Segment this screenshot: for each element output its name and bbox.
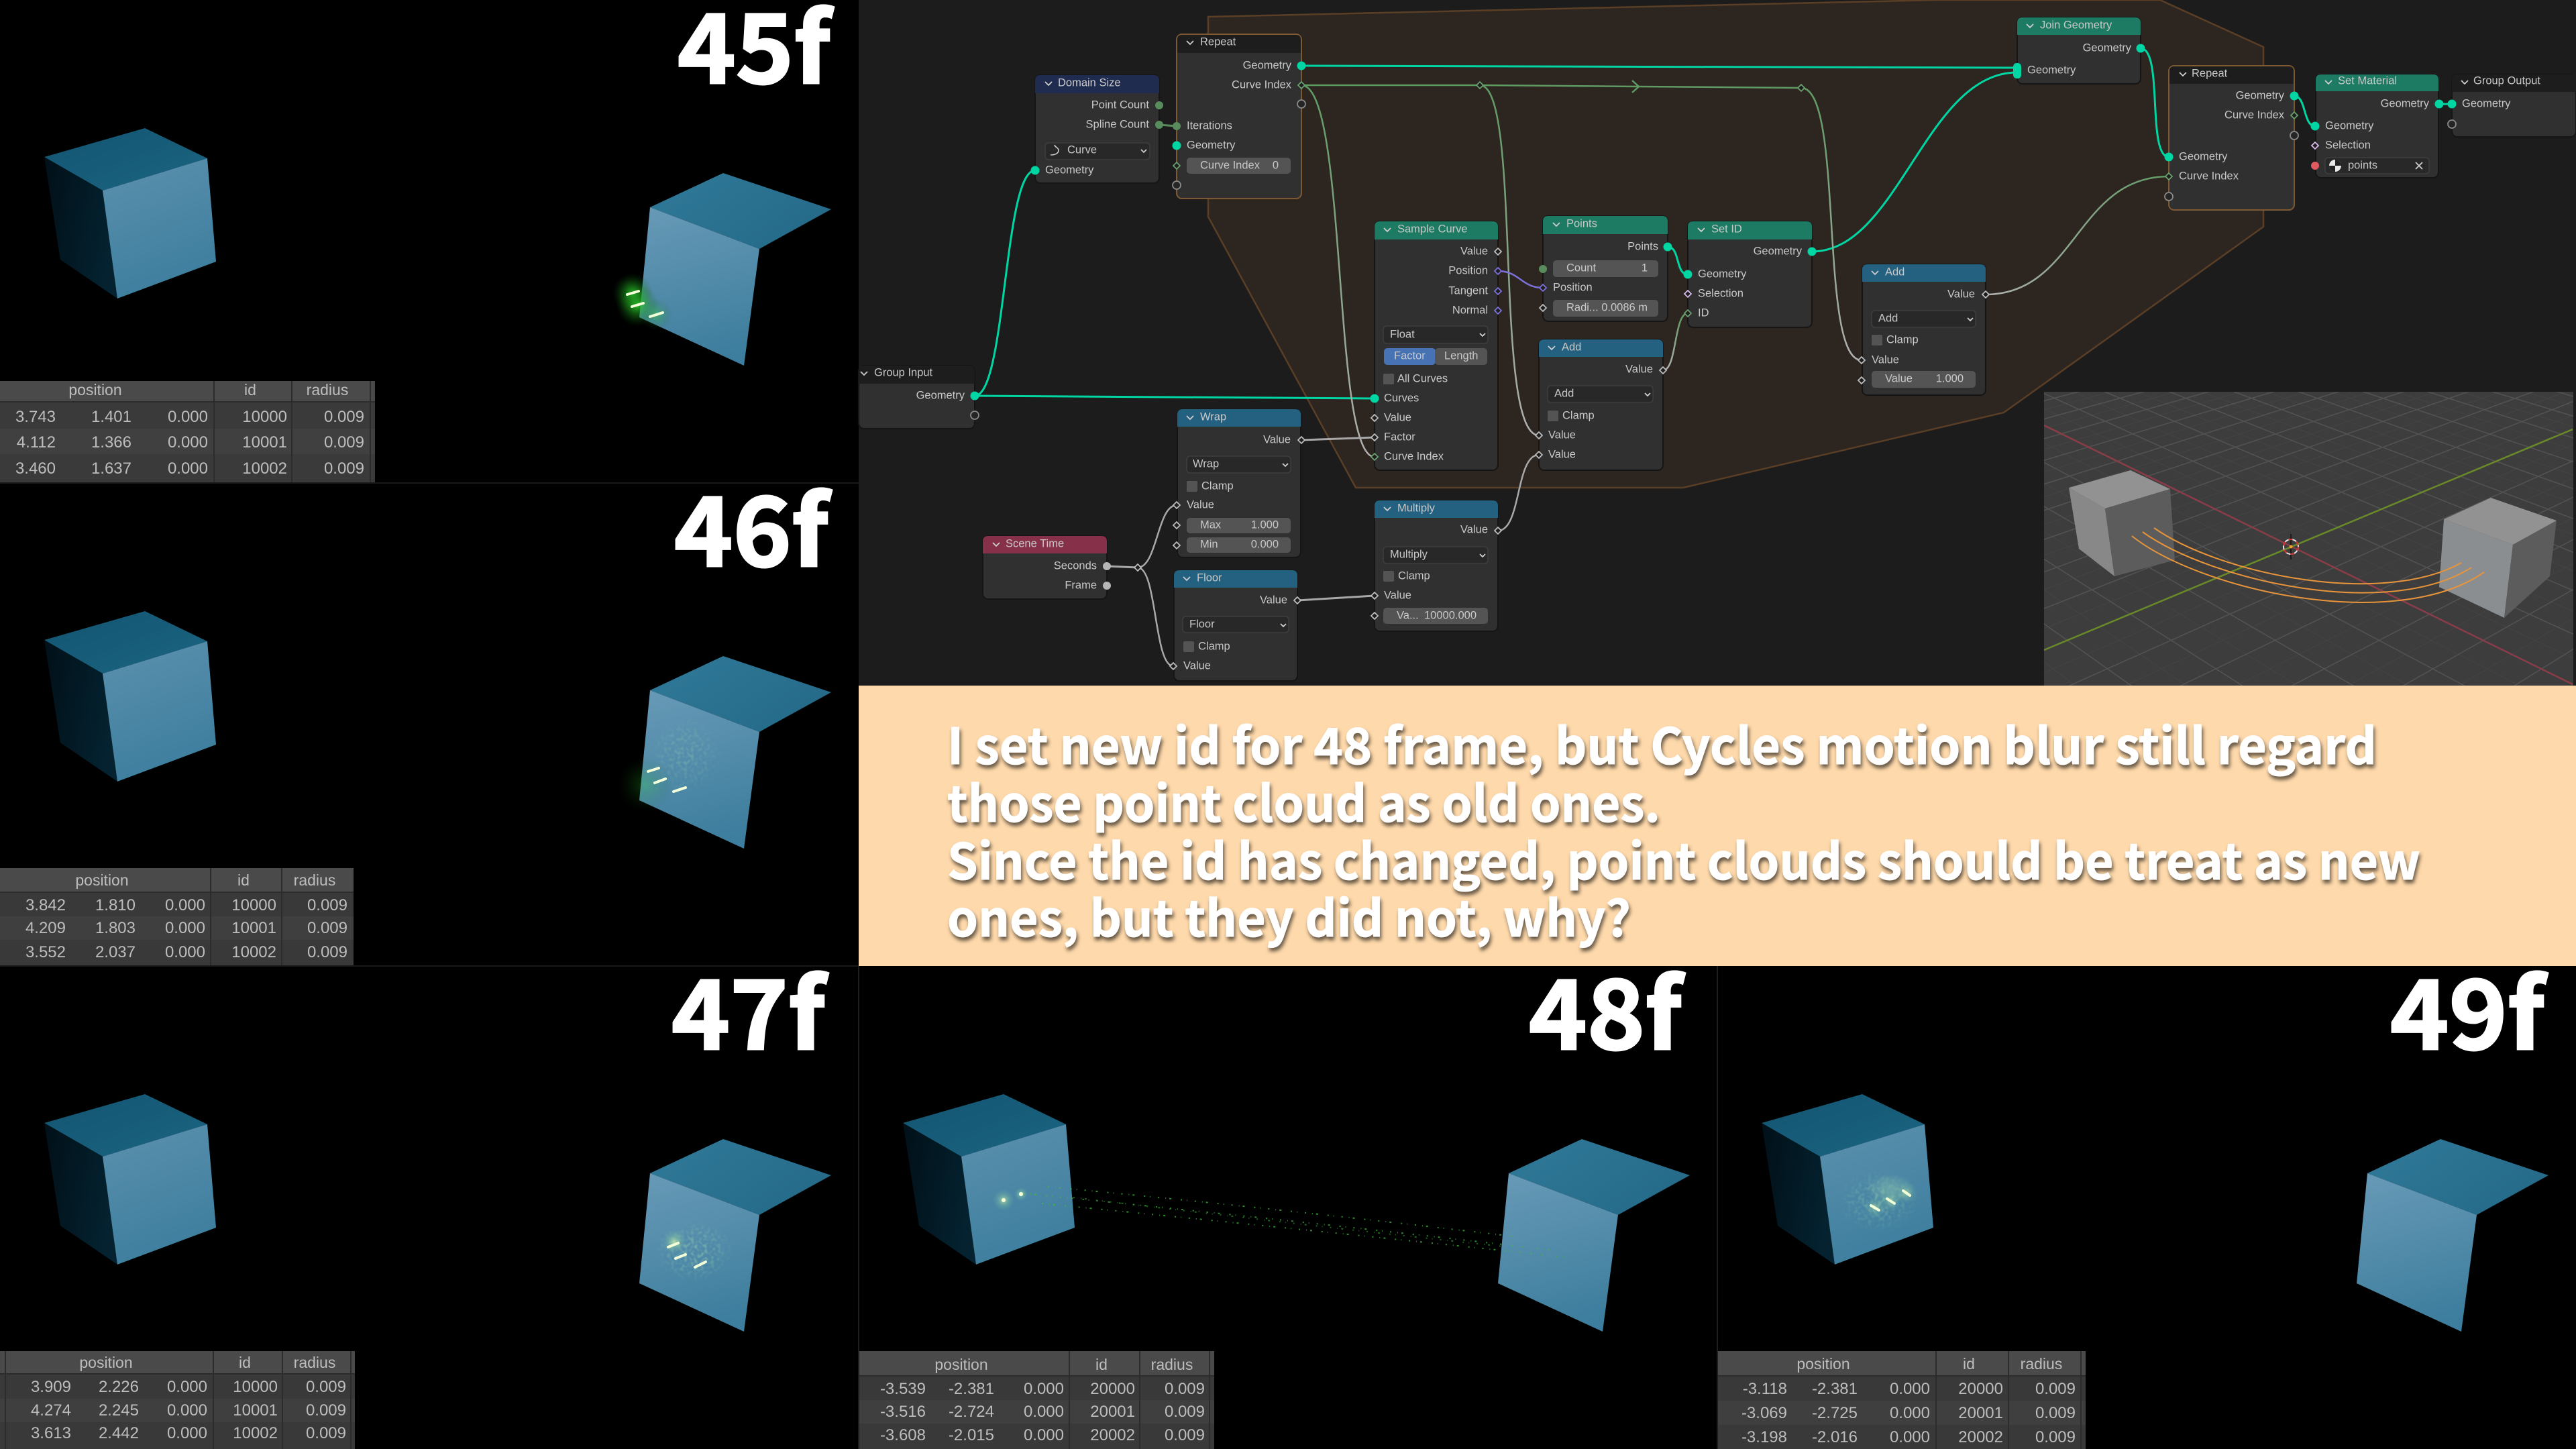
spreadsheet 45f: 0.009	[324, 408, 364, 426]
node: Group Output: Group Output	[2473, 75, 2540, 87]
spreadsheet 47f: 2.442	[99, 1424, 139, 1442]
spreadsheet 48f: -3.539	[880, 1380, 926, 1398]
node: Repeat output: Repeat	[2192, 67, 2228, 79]
node: Points: Points	[1627, 240, 1658, 252]
node: Add (Value): Add	[1562, 341, 1581, 353]
node: Scene Time	[983, 536, 1111, 599]
node: Add (Value): Value	[1548, 429, 1576, 441]
node: Points: Radi...	[1566, 302, 1599, 314]
spreadsheet 46f	[0, 868, 354, 966]
node: Domain Size: Curve	[1067, 144, 1097, 156]
node: Add (Curve Index): Add	[1878, 313, 1898, 325]
spreadsheet 49f: -2.016	[1812, 1428, 1858, 1446]
node: Floor: Floor	[1197, 572, 1222, 584]
spreadsheet 47f: 0.009	[306, 1424, 346, 1442]
spreadsheet 49f: -3.198	[1741, 1428, 1787, 1446]
node: Join Geometry: Join Geometry	[2040, 19, 2112, 31]
spreadsheet 49f: -3.118	[1743, 1380, 1787, 1398]
spreadsheet 49f: 0.009	[2035, 1380, 2076, 1398]
spreadsheet 49f: 20001	[1958, 1404, 2003, 1422]
spreadsheet 47f: 3.909	[31, 1378, 71, 1396]
spreadsheet 48f: 0.009	[1165, 1426, 1205, 1444]
node: Repeat output: Geometry	[2236, 90, 2285, 102]
node: Add (Value): Clamp	[1562, 409, 1595, 421]
panel: frame 47f render	[0, 938, 831, 1449]
node: Multiply: Value	[1460, 523, 1488, 535]
spreadsheet 46f: 1.803	[95, 919, 136, 937]
node: Group Input	[859, 366, 979, 429]
spreadsheet 45f: 0.009	[324, 433, 364, 451]
node: Repeat input: Geometry	[1243, 59, 1292, 71]
node: Domain Size: Domain Size	[1058, 76, 1121, 89]
node: Sample Curve: All Curves	[1397, 373, 1448, 385]
spreadsheet 47f: 0.009	[306, 1378, 346, 1396]
node: Set Material	[2310, 74, 2443, 178]
banner text: ones, but they did not, why?	[947, 879, 1631, 951]
spreadsheet 45f: 10000	[242, 408, 287, 426]
node: Domain Size: Point Count	[1091, 99, 1149, 111]
spreadsheet 48f: -2.381	[949, 1380, 994, 1398]
title 46f: 46f	[674, 455, 832, 594]
spreadsheet 47f: 10002	[233, 1424, 278, 1442]
node: Set ID: ID	[1698, 307, 1709, 319]
spreadsheet 47f: 2.245	[99, 1401, 139, 1419]
spreadsheet 46f: 0.000	[165, 896, 205, 914]
spreadsheet 49f: id	[1963, 1355, 1975, 1373]
spreadsheet 49f: 20000	[1958, 1380, 2003, 1398]
node: Floor	[1170, 570, 1301, 681]
node: Sample Curve: Value	[1460, 246, 1488, 258]
spreadsheet 49f: 0.000	[1890, 1380, 1930, 1398]
node: Multiply: Multiply	[1397, 502, 1436, 514]
node: Add (Curve Index): Value	[1885, 373, 1913, 385]
spreadsheet 45f: 0.000	[168, 408, 208, 426]
spreadsheet 47f: 2.226	[99, 1378, 139, 1396]
spreadsheet 47f: 4.274	[31, 1401, 71, 1419]
spreadsheet 48f: 0.009	[1165, 1380, 1205, 1398]
node: Add (Value): Add	[1554, 388, 1574, 400]
spreadsheet 48f: 20002	[1090, 1426, 1135, 1444]
spreadsheet 46f: 0.009	[307, 919, 347, 937]
node: Repeat output: Curve Index	[2179, 170, 2239, 182]
node: Add (Curve Index): Value	[1947, 288, 1975, 301]
node: Sample Curve	[1370, 221, 1501, 470]
node: Set Material: Geometry	[2381, 98, 2430, 110]
cubes 49f	[1762, 1094, 2548, 1332]
spreadsheet 46f: 10000	[231, 896, 276, 914]
node: Scene Time: Scene Time	[1006, 538, 1064, 550]
node: Add (Curve Index): 1.000	[1936, 373, 1964, 385]
node: Sample Curve: Value	[1384, 412, 1411, 424]
node: Sample Curve: Normal	[1452, 305, 1488, 317]
node: Points: 0.0086 m	[1601, 302, 1648, 314]
node: Repeat input: Geometry	[1187, 140, 1236, 152]
spreadsheet 45f: 10002	[242, 460, 287, 478]
node: Add (Value): Value	[1548, 448, 1576, 460]
spreadsheet 45f: id	[244, 381, 256, 398]
panel: frame 46f render	[0, 455, 832, 966]
spreadsheet 48f: 0.009	[1165, 1403, 1205, 1421]
node: Scene Time: Frame	[1065, 580, 1097, 592]
node: Sample Curve: Sample Curve	[1397, 223, 1468, 235]
spreadsheet 45f	[0, 381, 375, 483]
node: Floor: Value	[1260, 594, 1287, 606]
node: Repeat output: Geometry	[2179, 150, 2228, 162]
cubes 45f	[44, 128, 831, 366]
panel: frame 45f render	[0, 0, 834, 483]
spreadsheet 46f: 1.810	[95, 896, 136, 914]
spreadsheet 48f: 0.000	[1024, 1380, 1064, 1398]
wires	[975, 48, 2452, 666]
spreadsheet 47f: 0.000	[167, 1401, 207, 1419]
axis lines	[2044, 425, 2573, 684]
node: Add (Curve Index): Value	[1872, 354, 1899, 366]
node: Wrap: Value	[1187, 499, 1214, 511]
spreadsheet 46f: 2.037	[95, 943, 136, 961]
spreadsheet 46f: radius	[294, 871, 335, 889]
spreadsheet 47f: 10001	[233, 1401, 278, 1419]
node: Join Geometry: Geometry	[2027, 64, 2076, 76]
dotted motion streaks 48f	[1023, 1187, 1565, 1257]
spreadsheet 48f: position	[934, 1356, 988, 1373]
node: Wrap: Value	[1263, 433, 1291, 445]
panel: frame 48f render	[859, 938, 1690, 1449]
node: Multiply: Value	[1384, 589, 1411, 601]
node: Multiply: Multiply	[1390, 549, 1428, 561]
spreadsheet 47f: 0.009	[306, 1401, 346, 1419]
spreadsheet 48f: -3.516	[880, 1403, 926, 1421]
spreadsheet 49f: 20002	[1958, 1428, 2003, 1446]
node: Set ID: Set ID	[1711, 223, 1742, 235]
spreadsheet 48f: 0.000	[1024, 1426, 1064, 1444]
spreadsheet 45f: radius	[307, 381, 348, 398]
node: Add (Curve Index)	[1858, 264, 1989, 395]
spreadsheet 47f: 0.000	[167, 1424, 207, 1442]
node: Add (Value)	[1536, 339, 1666, 470]
banner text: Since the id has changed, point clouds should be treat as new	[947, 822, 2420, 894]
spreadsheet 45f: 4.112	[17, 433, 56, 451]
node: Scene Time: Seconds	[1054, 559, 1097, 572]
spreadsheet 48f: 0.000	[1024, 1403, 1064, 1421]
spreadsheet 47f: id	[239, 1354, 251, 1371]
banner	[859, 686, 2576, 966]
node: Points: Count	[1566, 262, 1596, 274]
spreadsheet 49f: 0.009	[2035, 1428, 2076, 1446]
node: Wrap: Min	[1200, 538, 1218, 550]
spreadsheet 45f: 3.460	[15, 460, 56, 478]
node: Sample Curve: Factor	[1394, 350, 1426, 362]
node: Points: 1	[1642, 262, 1648, 274]
spreadsheet 48f: 20001	[1090, 1403, 1135, 1421]
spreadsheet 47f	[0, 1351, 355, 1449]
node: Wrap: Wrap	[1200, 411, 1226, 423]
node: Sample Curve: Length	[1444, 350, 1478, 362]
spreadsheet 46f: 0.009	[307, 943, 347, 961]
node: Add (Curve Index): Add	[1885, 266, 1904, 278]
title 48f: 48f	[1529, 938, 1685, 1077]
banner text	[947, 707, 2420, 951]
spreadsheet 47f: 10000	[233, 1378, 278, 1396]
spreadsheet 49f: 0.000	[1890, 1428, 1930, 1446]
node: Group Input: Geometry	[916, 389, 965, 401]
spreadsheet 48f: radius	[1151, 1356, 1193, 1373]
spreadsheet 45f: position	[68, 381, 122, 398]
node: Wrap: 1.000	[1251, 519, 1279, 531]
spreadsheet 46f: position	[75, 871, 129, 889]
node: Repeat input: Repeat	[1200, 36, 1236, 48]
node: Wrap	[1173, 409, 1305, 557]
node: Set Material: points	[2348, 160, 2377, 172]
node: Set Material: Geometry	[2325, 119, 2374, 131]
title 47f: 47f	[672, 938, 828, 1077]
spreadsheet 49f: position	[1796, 1355, 1850, 1373]
spreadsheet 47f: position	[79, 1354, 133, 1371]
spreadsheet 48f: 20000	[1090, 1380, 1135, 1398]
node: Multiply: Clamp	[1398, 570, 1430, 582]
spreadsheet 45f: 10001	[242, 433, 287, 451]
node: Wrap: Wrap	[1193, 458, 1219, 470]
spreadsheet 45f: 1.637	[91, 460, 131, 478]
node: Sample Curve: Position	[1448, 264, 1488, 276]
node: Multiply	[1371, 500, 1501, 631]
node: Set ID: Selection	[1698, 287, 1743, 299]
panel: frame 49f render	[1717, 938, 2548, 1449]
spreadsheet 46f: 3.552	[25, 943, 66, 961]
node: Sample Curve: Curves	[1384, 392, 1419, 404]
node: Sample Curve: Tangent	[1448, 284, 1488, 297]
spreadsheet 46f: 0.000	[165, 919, 205, 937]
spreadsheet 46f: 4.209	[25, 919, 66, 937]
green glow and streaks 45f	[612, 273, 672, 331]
spreadsheet 45f: 1.401	[91, 408, 131, 426]
node: Set Material: Set Material	[2338, 75, 2397, 87]
node: Add (Value): Value	[1625, 364, 1653, 376]
green glow and streaks 46f	[617, 716, 722, 813]
spreadsheet 46f: id	[237, 871, 250, 889]
node: Sample Curve: Curve Index	[1384, 451, 1444, 463]
spreadsheet 49f: 0.009	[2035, 1404, 2076, 1422]
spreadsheet 48f	[859, 1351, 1214, 1449]
node: Repeat output	[2164, 66, 2298, 210]
spreadsheet 48f: id	[1095, 1356, 1108, 1373]
spreadsheet 48f: -2.724	[949, 1403, 994, 1421]
node: Group Output	[2447, 74, 2576, 137]
spreadsheet 45f: 0.009	[324, 460, 364, 478]
node: Repeat input: 0	[1273, 160, 1279, 172]
spreadsheet 49f: -3.069	[1741, 1404, 1787, 1422]
node: Add (Curve Index): Clamp	[1886, 334, 1919, 346]
banner text: those point cloud as old ones.	[947, 765, 1660, 837]
spreadsheet 47f: 0.000	[167, 1378, 207, 1396]
spreadsheet 49f: 0.000	[1890, 1404, 1930, 1422]
node: Repeat input	[1173, 34, 1305, 199]
frame: repeat zone	[1208, 0, 2263, 488]
cubes 46f	[44, 611, 831, 849]
node: Repeat output: Curve Index	[2224, 109, 2285, 121]
cubes 48f	[903, 1094, 1690, 1332]
spreadsheet 49f: -2.725	[1812, 1404, 1858, 1422]
node: Join Geometry	[2013, 17, 2145, 84]
spreadsheet 45f: 1.366	[91, 433, 131, 451]
spreadsheet 45f: 3.743	[15, 408, 56, 426]
node: Group Output: Geometry	[2462, 98, 2511, 110]
spreadsheet 47f: 3.613	[31, 1424, 71, 1442]
spreadsheet 47f: radius	[294, 1354, 335, 1371]
node: Points	[1539, 216, 1672, 321]
cubes 47f	[44, 1094, 831, 1332]
node: Wrap: 0.000	[1251, 538, 1279, 550]
node: Multiply: 10000.000	[1424, 609, 1477, 621]
spreadsheet 49f: radius	[2021, 1355, 2062, 1373]
node: Set ID: Geometry	[1698, 268, 1747, 280]
node: Set ID: Geometry	[1754, 246, 1803, 258]
title 49f: 49f	[2390, 938, 2548, 1077]
panel: 3D viewport	[2044, 392, 2573, 686]
node: Wrap: Clamp	[1201, 480, 1234, 492]
spreadsheet 45f: 0.000	[168, 433, 208, 451]
node: Sample Curve: Factor	[1384, 431, 1415, 443]
node: Domain Size: Geometry	[1045, 164, 1094, 176]
spreadsheet 46f: 3.842	[25, 896, 66, 914]
node: Points: Points	[1566, 217, 1597, 229]
bright dots 48f	[993, 1187, 1028, 1211]
spreadsheet 46f: 0.009	[307, 896, 347, 914]
orange curves	[2132, 528, 2484, 602]
panel: node editor	[859, 0, 2576, 686]
node: Repeat input: Curve Index	[1200, 160, 1260, 172]
spreadsheet 45f: 0.000	[168, 460, 208, 478]
right cube	[2439, 498, 2557, 618]
banner text: I set new id for 48 frame, but Cycles motion blur still regard	[947, 707, 2377, 779]
node: Domain Size	[1030, 75, 1163, 183]
node: Floor: Value	[1183, 660, 1211, 672]
spreadsheet 48f: -3.608	[880, 1426, 926, 1444]
glow and streaks 49f	[1837, 1169, 1920, 1233]
node: Floor: Clamp	[1198, 640, 1230, 652]
node: Set Material: Selection	[2325, 140, 2371, 152]
node: Group Input: Group Input	[874, 366, 933, 378]
spreadsheet 46f: 10002	[231, 943, 276, 961]
node: Set ID	[1684, 221, 1817, 327]
spreadsheet 49f	[1717, 1351, 2086, 1449]
spreadsheet 49f: -2.381	[1812, 1380, 1858, 1398]
spreadsheet 46f: 0.000	[165, 943, 205, 961]
node: Join Geometry: Geometry	[2083, 42, 2132, 54]
node: Multiply: Va...	[1397, 609, 1419, 621]
node: Sample Curve: Float	[1390, 329, 1415, 341]
3D cursor	[2284, 534, 2298, 559]
left cube	[2069, 470, 2175, 576]
node: Floor: Floor	[1189, 619, 1215, 631]
node: Wrap: Max	[1200, 519, 1222, 531]
spreadsheet 46f: 10001	[231, 919, 276, 937]
node: Points: Position	[1553, 282, 1593, 294]
node: Domain Size: Spline Count	[1086, 118, 1149, 130]
glow and streaks 47f	[654, 1219, 735, 1283]
spreadsheet 48f: -2.015	[949, 1426, 994, 1444]
node: Repeat input: Iterations	[1187, 119, 1232, 131]
node: Repeat input: Curve Index	[1232, 79, 1292, 91]
